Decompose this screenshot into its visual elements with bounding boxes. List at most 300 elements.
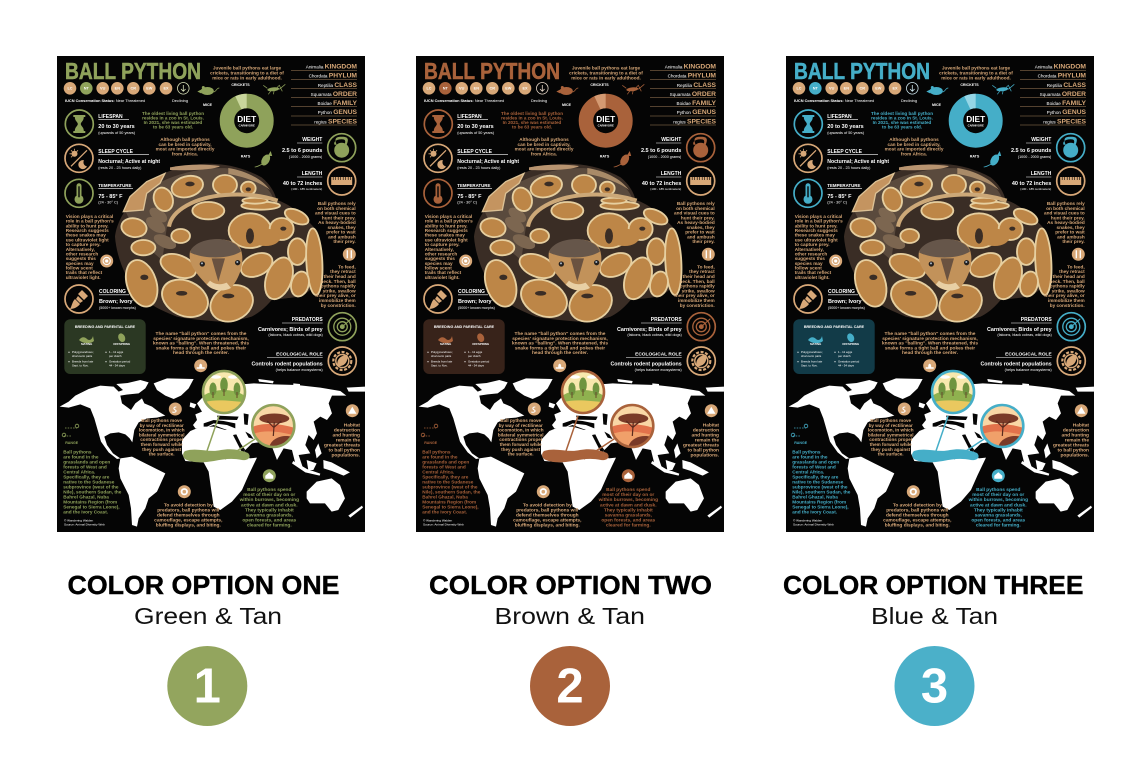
- weight: (1000 - 2000 grams): [648, 155, 681, 159]
- weight: 2.5 to 6 pounds: [1011, 148, 1051, 154]
- locomotion note: Ball pythons move: [141, 418, 183, 423]
- vision note: Research suggests: [425, 228, 468, 233]
- sleep cycle: [65, 144, 160, 172]
- panel: breeding and parental care: 1 - 11 eggs: [838, 350, 853, 354]
- taxonomy table: Reptilia CLASS: [1047, 82, 1087, 89]
- feeding note: neck. Then, ball: [680, 279, 715, 284]
- vision note: Vision plays a critical: [425, 214, 472, 219]
- world map: [60, 378, 365, 527]
- hunting note: snakes, they: [687, 225, 715, 230]
- predators: (falcons, black cobras, wild dogs): [268, 333, 323, 337]
- taxonomy table: [650, 64, 717, 125]
- conservation status row: LC: [796, 87, 802, 91]
- lifespan: 20 to 30 years: [827, 124, 864, 130]
- taxonomy table: regius SPECIES: [314, 118, 358, 125]
- locomotion note: bilateral symmetrical: [139, 432, 185, 437]
- range note: Nile), southern Sudan, the: [63, 490, 122, 495]
- coloring: COLORING: [99, 289, 126, 295]
- title: BALL PYTHON: [424, 58, 560, 84]
- range note: Specifically, they are: [422, 475, 469, 480]
- sleep cycle: Nocturnal; Active at night: [98, 159, 160, 165]
- habitat circle: forest: [562, 371, 604, 413]
- locomotion note: by way of rectilinear: [140, 423, 184, 428]
- diet donut chart: MICE: [203, 103, 213, 107]
- range note: Central Africa.: [422, 470, 454, 475]
- conservation status row: LC: [426, 87, 432, 91]
- habitat note: active at dawn and dusk.: [970, 502, 1027, 508]
- defense note: camouflage, escape attempts,: [513, 517, 582, 523]
- taxonomy table: Boidae FAMILY: [1046, 100, 1087, 107]
- conservation status row: EN: [115, 87, 120, 91]
- heading: color option two: COLOR OPTION TWO: [429, 570, 712, 600]
- lifespan: [424, 110, 495, 138]
- locomotion note: contractions propel: [140, 437, 183, 442]
- vision note: ability to hunt prey.: [795, 223, 838, 228]
- weight: 2.5 to 6 pounds: [641, 148, 681, 154]
- habitat circle: savanna: [611, 405, 653, 447]
- conservation status row: LC: [67, 87, 73, 91]
- oldest python note: In 2021, she was estimated: [144, 120, 203, 125]
- icon: locomotion: [898, 402, 911, 416]
- poster: color option three (blue): [786, 56, 1094, 532]
- predators: (falcons, black cobras, wild dogs): [627, 333, 682, 337]
- sleep cycle: (rests 20 - 23 hours daily): [98, 166, 142, 170]
- sleep cycle: SLEEP CYCLE: [98, 149, 134, 155]
- feeding note: immobilize them: [1048, 298, 1085, 303]
- range heading and icon: RANGE: [65, 441, 79, 445]
- oldest python note: to be 63 years old.: [882, 124, 922, 130]
- range note: Specifically, they are: [63, 475, 110, 480]
- habitat note: most of their day on or: [602, 492, 654, 498]
- credits: © Wandering Walden: [64, 518, 93, 522]
- captivity note: can be bred in captivity,: [517, 142, 571, 147]
- oldest python note: The oldest living ball python: [142, 111, 204, 116]
- predators: PREDATORS: [1021, 317, 1052, 323]
- locomotion note: bilateral symmetrical: [498, 432, 544, 437]
- weight: [282, 134, 356, 162]
- diet donut chart: DIET: [596, 114, 615, 124]
- taxonomy table: Chordata PHYLUM: [1038, 73, 1086, 80]
- locomotion note: Ball pythons move: [870, 418, 912, 423]
- ecological role: Controls rodent populations: [980, 362, 1052, 368]
- vision note: Vision plays a critical: [795, 214, 842, 219]
- threats note: greatest threats: [324, 442, 360, 448]
- coloring: [424, 285, 495, 313]
- poster: color option two (brown): [416, 56, 724, 532]
- vision note: follow scent: [425, 265, 452, 270]
- hunting note: and visual cues to: [315, 210, 356, 216]
- vision note: trails that reflect: [425, 270, 462, 275]
- vision note: Research suggests: [66, 228, 109, 233]
- range note: and the Ivory Coast.: [422, 510, 467, 515]
- hunting note: As heavy-bodied: [318, 220, 356, 225]
- habitat note: within burrows, becoming: [598, 497, 658, 503]
- habitat note: open forests, and areas: [601, 518, 656, 524]
- conservation status row: Declining: [531, 98, 547, 103]
- taxonomy table: Reptilia CLASS: [318, 82, 358, 89]
- locomotion note: locomotion, in which: [498, 428, 544, 433]
- sleep cycle: Nocturnal; Active at night: [827, 159, 889, 165]
- oldest python note: resides in a zoo in St. Louis.: [501, 116, 563, 120]
- panel: breeding and parental care: 44 - 54 days: [109, 364, 125, 368]
- vision note: these snakes may: [795, 233, 835, 238]
- locomotion note: by way of rectilinear: [869, 423, 913, 428]
- panel: breeding and parental care: MATING: [81, 342, 93, 346]
- habitat note: Ball pythons spend: [606, 487, 650, 493]
- threats note: destruction: [693, 428, 719, 434]
- temperature: (24 - 30° C): [827, 200, 848, 204]
- captivity note: most are imported directly: [885, 147, 944, 152]
- oldest python note: The oldest living ball python: [501, 111, 563, 116]
- feeding note: they retract: [330, 269, 356, 274]
- coloring: Brown; Ivory: [99, 299, 134, 305]
- taxonomy table: [291, 64, 358, 125]
- diet donut chart: [197, 83, 285, 167]
- conservation status row: CR: [860, 87, 865, 91]
- icon: coiled snake: [923, 359, 936, 372]
- range heading and icon: [791, 424, 808, 445]
- sleep cycle: Nocturnal; Active at night: [457, 159, 519, 165]
- taxonomy table: Boidae FAMILY: [676, 100, 717, 107]
- oldest python note: to be 63 years old.: [153, 124, 193, 130]
- snake photo: [474, 164, 683, 328]
- habitat circle: forest: [932, 371, 974, 413]
- coloring: Brown; Ivory: [458, 299, 493, 305]
- locomotion note: locomotion, in which: [868, 428, 914, 433]
- feeding note: they retract: [689, 269, 715, 274]
- taxonomy table: Python GENUS: [1047, 109, 1087, 116]
- range note: Senegal to Sierra Leone),: [792, 505, 849, 510]
- panel: breeding and parental care: per clutch: [838, 354, 851, 358]
- length: LENGTH: [1031, 171, 1052, 177]
- conservation status row: CR: [490, 87, 495, 91]
- vision note: ultraviolet light.: [425, 275, 460, 280]
- taxonomy table: Chordata PHYLUM: [668, 73, 716, 80]
- threats note: Habitat: [1073, 422, 1089, 428]
- threats note: populations.: [1060, 452, 1089, 458]
- habitat note: active at dawn and dusk.: [600, 502, 657, 508]
- conservation status row: IUCN Conservation Status: Near Threatened: [424, 98, 504, 103]
- feeding note: their head and: [1053, 274, 1085, 279]
- name origin note: The name "ball python" comes from the: [515, 331, 606, 337]
- ecological role: [251, 347, 356, 375]
- hunting note: and ambush: [1057, 234, 1085, 239]
- icon: threat warning: [346, 404, 359, 417]
- feeding note: they retract: [1059, 269, 1085, 274]
- feeding note: by constriction.: [321, 303, 356, 308]
- captivity note: Although ball pythons: [519, 137, 569, 142]
- lifespan: 20 to 30 years: [98, 124, 135, 130]
- icon: defense: [537, 485, 550, 498]
- feeding note: by constriction.: [1050, 303, 1085, 308]
- conservation status row: EX: [892, 87, 898, 91]
- name origin note: head through the center.: [173, 350, 229, 356]
- snake photo: [844, 164, 1053, 328]
- hunting note: prefer to wait: [326, 230, 356, 234]
- taxonomy table: Squamata ORDER: [670, 91, 716, 98]
- habitat note: open forests, and areas: [971, 518, 1026, 524]
- poster: color option one (green): [57, 56, 365, 532]
- name origin note: snake forms a tight ball and pokes their: [885, 345, 975, 351]
- panel: breeding and parental care: Sept. to Nov.: [72, 364, 89, 368]
- feeding note: their head and: [683, 274, 715, 279]
- temperature: TEMPERATURE: [98, 183, 131, 188]
- diet donut chart: CARNIVORE: [239, 124, 255, 128]
- vision note: Vision plays a critical: [66, 214, 113, 219]
- length: [642, 167, 715, 195]
- ecological role: ECOLOGICAL ROLE: [635, 352, 682, 358]
- icon: burrow: [992, 469, 1005, 482]
- threats note: and hunting: [692, 432, 719, 438]
- vision note: follow scent: [795, 265, 822, 270]
- predators: Carnivores; Birds of prey: [987, 327, 1052, 333]
- defense note: defend themselves through: [516, 512, 579, 518]
- temperature: 75 - 85° F: [457, 194, 482, 200]
- juvenile diet note: mice or rats in early adulthood.: [571, 75, 641, 80]
- vision note: suggests this: [66, 256, 96, 261]
- taxonomy table: regius SPECIES: [673, 118, 717, 125]
- conservation status row: EN: [474, 87, 479, 91]
- taxonomy table: Animalia KINGDOM: [306, 64, 357, 71]
- range note: native to the Sudanese: [63, 480, 115, 485]
- vision note: other research: [795, 251, 827, 256]
- feeding note: pythons rapidly: [1050, 284, 1085, 289]
- predators: [617, 313, 715, 341]
- hunting note: prefer to wait: [1055, 230, 1085, 234]
- icon: burrow: [263, 469, 276, 482]
- vision note: follow scent: [66, 265, 93, 270]
- panel: breeding and parental care: 1 - 11 eggs: [109, 350, 124, 354]
- icon: threat warning: [705, 404, 718, 417]
- panel: breeding and parental care: per clutch: [109, 354, 122, 358]
- panel: breeding and parental care: Gestation period: [838, 360, 860, 364]
- feeding note: strike, swallow: [323, 288, 356, 293]
- coloring: COLORING: [828, 289, 855, 295]
- subheading: brown and tan: Brown & Tan: [494, 603, 645, 629]
- habitat note: within burrows, becoming: [968, 497, 1028, 503]
- range heading and icon: RANGE: [424, 441, 438, 445]
- coloring: Brown; Ivory: [828, 299, 863, 305]
- conservation status row: [64, 82, 189, 103]
- range highlight on Africa: [912, 416, 984, 462]
- captivity note: can be bred in captivity,: [158, 142, 212, 147]
- heading: color option one: COLOR OPTION ONE: [68, 570, 340, 600]
- conservation status row: EN: [844, 87, 849, 91]
- hunting note: prefer to wait: [685, 230, 715, 234]
- hunting note: As heavy-bodied: [1047, 220, 1085, 225]
- badge: number three: 3: [921, 660, 948, 714]
- length: LENGTH: [302, 171, 323, 177]
- range note: grasslands and open: [63, 460, 110, 465]
- captivity note: from Africa.: [531, 151, 557, 156]
- coloring: (5000+ known morphs): [458, 306, 495, 310]
- name origin note: snake forms a tight ball and pokes their: [515, 345, 605, 351]
- feeding note: pythons rapidly: [680, 284, 715, 289]
- diet donut chart: DIET: [966, 114, 985, 124]
- locomotion note: locomotion, in which: [139, 428, 185, 433]
- sleep cycle: (rests 20 - 23 hours daily): [457, 166, 501, 170]
- habitat note: most of their day on or: [972, 492, 1024, 498]
- range note: Mountains Region (from: [792, 500, 846, 505]
- conservation status row: [793, 82, 918, 103]
- conservation status row: VU: [459, 87, 465, 91]
- vision note: species may: [795, 261, 823, 266]
- range note: Nile), southern Sudan, the: [422, 490, 481, 495]
- conservation status row: VU: [100, 87, 106, 91]
- range note: forests of West and: [792, 465, 836, 470]
- length: [1012, 167, 1085, 195]
- defense note: predators, ball pythons will: [157, 507, 219, 513]
- captivity note: most are imported directly: [156, 147, 215, 152]
- threats note: remain the: [695, 438, 719, 444]
- conservation status row: IUCN Conservation Status: Near Threatened: [65, 98, 145, 103]
- panel: breeding and parental care: short-term pairs: [431, 354, 452, 358]
- threats note: to ball python: [1058, 448, 1089, 454]
- habitat circle: forest: [203, 371, 245, 413]
- name origin note: The name "ball python" comes from the: [156, 331, 247, 337]
- range note: and the Ivory Coast.: [63, 510, 108, 515]
- length: 40 to 72 inches: [283, 181, 322, 187]
- habitat note: cleared for farming.: [606, 523, 651, 529]
- vision note: Alternatively,: [795, 247, 824, 252]
- threats note: to ball python: [688, 448, 719, 454]
- icon: locomotion: [528, 402, 541, 416]
- title: BALL PYTHON: [794, 58, 930, 84]
- habitat note: savanna grasslands,: [975, 512, 1023, 518]
- juvenile diet note: crickets, transitioning to a diet of: [210, 70, 284, 75]
- ecological role: Controls rodent populations: [251, 362, 323, 368]
- vision note: trails that reflect: [795, 270, 832, 275]
- conservation status row: IUCN Conservation Status: Near Threatened: [794, 98, 874, 103]
- range note: Central Africa.: [63, 470, 95, 475]
- range note: forests of West and: [422, 465, 466, 470]
- vision note: Research suggests: [795, 228, 838, 233]
- name origin note: known as "balling". When threatened, this: [512, 341, 608, 347]
- conservation status row: Declining: [172, 98, 188, 103]
- ecological role: (helps balance ecosystems): [1005, 368, 1052, 372]
- name origin note: species' signature protection mechanism,: [153, 336, 249, 342]
- range note: Senegal to Sierra Leone),: [422, 505, 479, 510]
- threats note: remain the: [336, 438, 360, 444]
- oldest python note: In 2021, she was estimated: [873, 120, 932, 125]
- ecological role: (helps balance ecosystems): [635, 368, 682, 372]
- juvenile diet note: mice or rats in early adulthood.: [941, 75, 1011, 80]
- captivity note: Although ball pythons: [160, 137, 210, 142]
- feeding note: To feed,: [697, 264, 715, 269]
- conservation status row: Declining: [901, 98, 917, 103]
- panel: breeding and parental care: Breeds from late: [431, 360, 453, 364]
- range highlight on Africa: [183, 416, 255, 462]
- threats note: greatest threats: [683, 442, 719, 448]
- vision note: Alternatively,: [425, 247, 454, 252]
- vision note: use ultraviolet light: [425, 237, 468, 242]
- feeding note: pythons rapidly: [321, 284, 356, 289]
- icon: burrow: [622, 469, 635, 482]
- sleep cycle: [424, 144, 519, 172]
- panel: breeding and parental care: 1 - 11 eggs: [468, 350, 483, 354]
- panel: breeding and parental care: MATING: [810, 342, 822, 346]
- diet donut chart: MICE: [562, 103, 572, 107]
- hunting note: and ambush: [328, 234, 356, 239]
- lifespan: LIFESPAN: [457, 114, 482, 120]
- vision note: use ultraviolet light: [795, 237, 838, 242]
- credits: Source: Animal Diversity Web: [64, 523, 105, 527]
- panel: breeding and parental care: 44 - 54 days: [468, 364, 484, 368]
- badge: number two: [530, 646, 610, 726]
- vision note: use ultraviolet light: [66, 237, 109, 242]
- weight: WEIGHT: [302, 137, 322, 143]
- habitat note: cleared for farming.: [976, 523, 1021, 529]
- icon: threat warning: [1075, 404, 1088, 417]
- oldest python note: resides in a zoo in St. Louis.: [142, 116, 204, 120]
- habitat note: Ball pythons spend: [976, 487, 1020, 493]
- juvenile diet note: Juvenile ball pythons eat large: [213, 65, 282, 70]
- conservation status row: NT: [443, 87, 449, 91]
- conservation status row: VU: [829, 87, 835, 91]
- hunting note: their prey.: [692, 239, 715, 244]
- range note: Ball pythons: [422, 450, 451, 454]
- feeding note: immobilize them: [678, 298, 715, 303]
- lifespan: [794, 110, 865, 138]
- threats note: destruction: [1063, 428, 1089, 434]
- hunting note: and visual cues to: [1044, 210, 1085, 216]
- diet donut chart: DIET: [237, 114, 256, 124]
- conservation status row: NT: [813, 87, 819, 91]
- locomotion note: the surface.: [149, 452, 175, 457]
- vision note: role in a ball python's: [795, 219, 843, 224]
- habitat circle: savanna: [981, 405, 1023, 447]
- panel: breeding and parental care: short-term pairs: [801, 354, 822, 358]
- hunting note: Ball pythons rely: [1047, 201, 1085, 206]
- range note: Bahrel Ghazal, Nuba: [63, 495, 109, 500]
- defense note: predators, ball pythons will: [516, 507, 578, 513]
- lifespan: (upwards of 50 years): [457, 131, 495, 135]
- habitat note: savanna grasslands,: [246, 512, 294, 518]
- hunting note: and visual cues to: [674, 210, 715, 216]
- taxonomy table: regius SPECIES: [1043, 118, 1087, 125]
- panel: breeding and parental care: short-term pairs: [72, 354, 93, 358]
- diet donut chart: RATS: [970, 154, 980, 158]
- habitat note: savanna grasslands,: [605, 512, 653, 518]
- defense note: camouflage, escape attempts,: [154, 517, 223, 523]
- coloring: COLORING: [458, 289, 485, 295]
- panel: breeding and parental care: BREEDING AND PARENTAL CARE: [804, 325, 865, 329]
- hunting note: Ball pythons rely: [318, 201, 356, 206]
- vision note: to capture prey.: [425, 242, 460, 247]
- length: (100 - 185 centimeters): [291, 187, 322, 191]
- icon: fork and knife: [1072, 248, 1085, 261]
- threats note: remain the: [1065, 438, 1089, 444]
- taxonomy table: Python GENUS: [677, 109, 717, 116]
- habitat note: Ball pythons spend: [247, 487, 291, 493]
- hunting note: Ball pythons rely: [677, 201, 715, 206]
- taxonomy table: Python GENUS: [318, 109, 358, 116]
- range note: Ball pythons: [63, 450, 92, 454]
- hunting note: hunt their prey.: [322, 215, 356, 220]
- temperature: [424, 179, 492, 207]
- locomotion note: the surface.: [878, 452, 904, 457]
- lifespan: LIFESPAN: [827, 114, 852, 120]
- vision note: other research: [66, 251, 98, 256]
- name origin note: head through the center.: [902, 350, 958, 356]
- diet donut chart: RATS: [600, 154, 610, 158]
- feeding note: immobilize them: [319, 298, 356, 303]
- defense note: bluffing displays, and biting.: [885, 522, 950, 528]
- credits: © Wandering Walden: [423, 518, 452, 522]
- conservation status row: EW: [146, 87, 153, 91]
- vision note: trails that reflect: [66, 270, 103, 275]
- temperature: [65, 179, 133, 207]
